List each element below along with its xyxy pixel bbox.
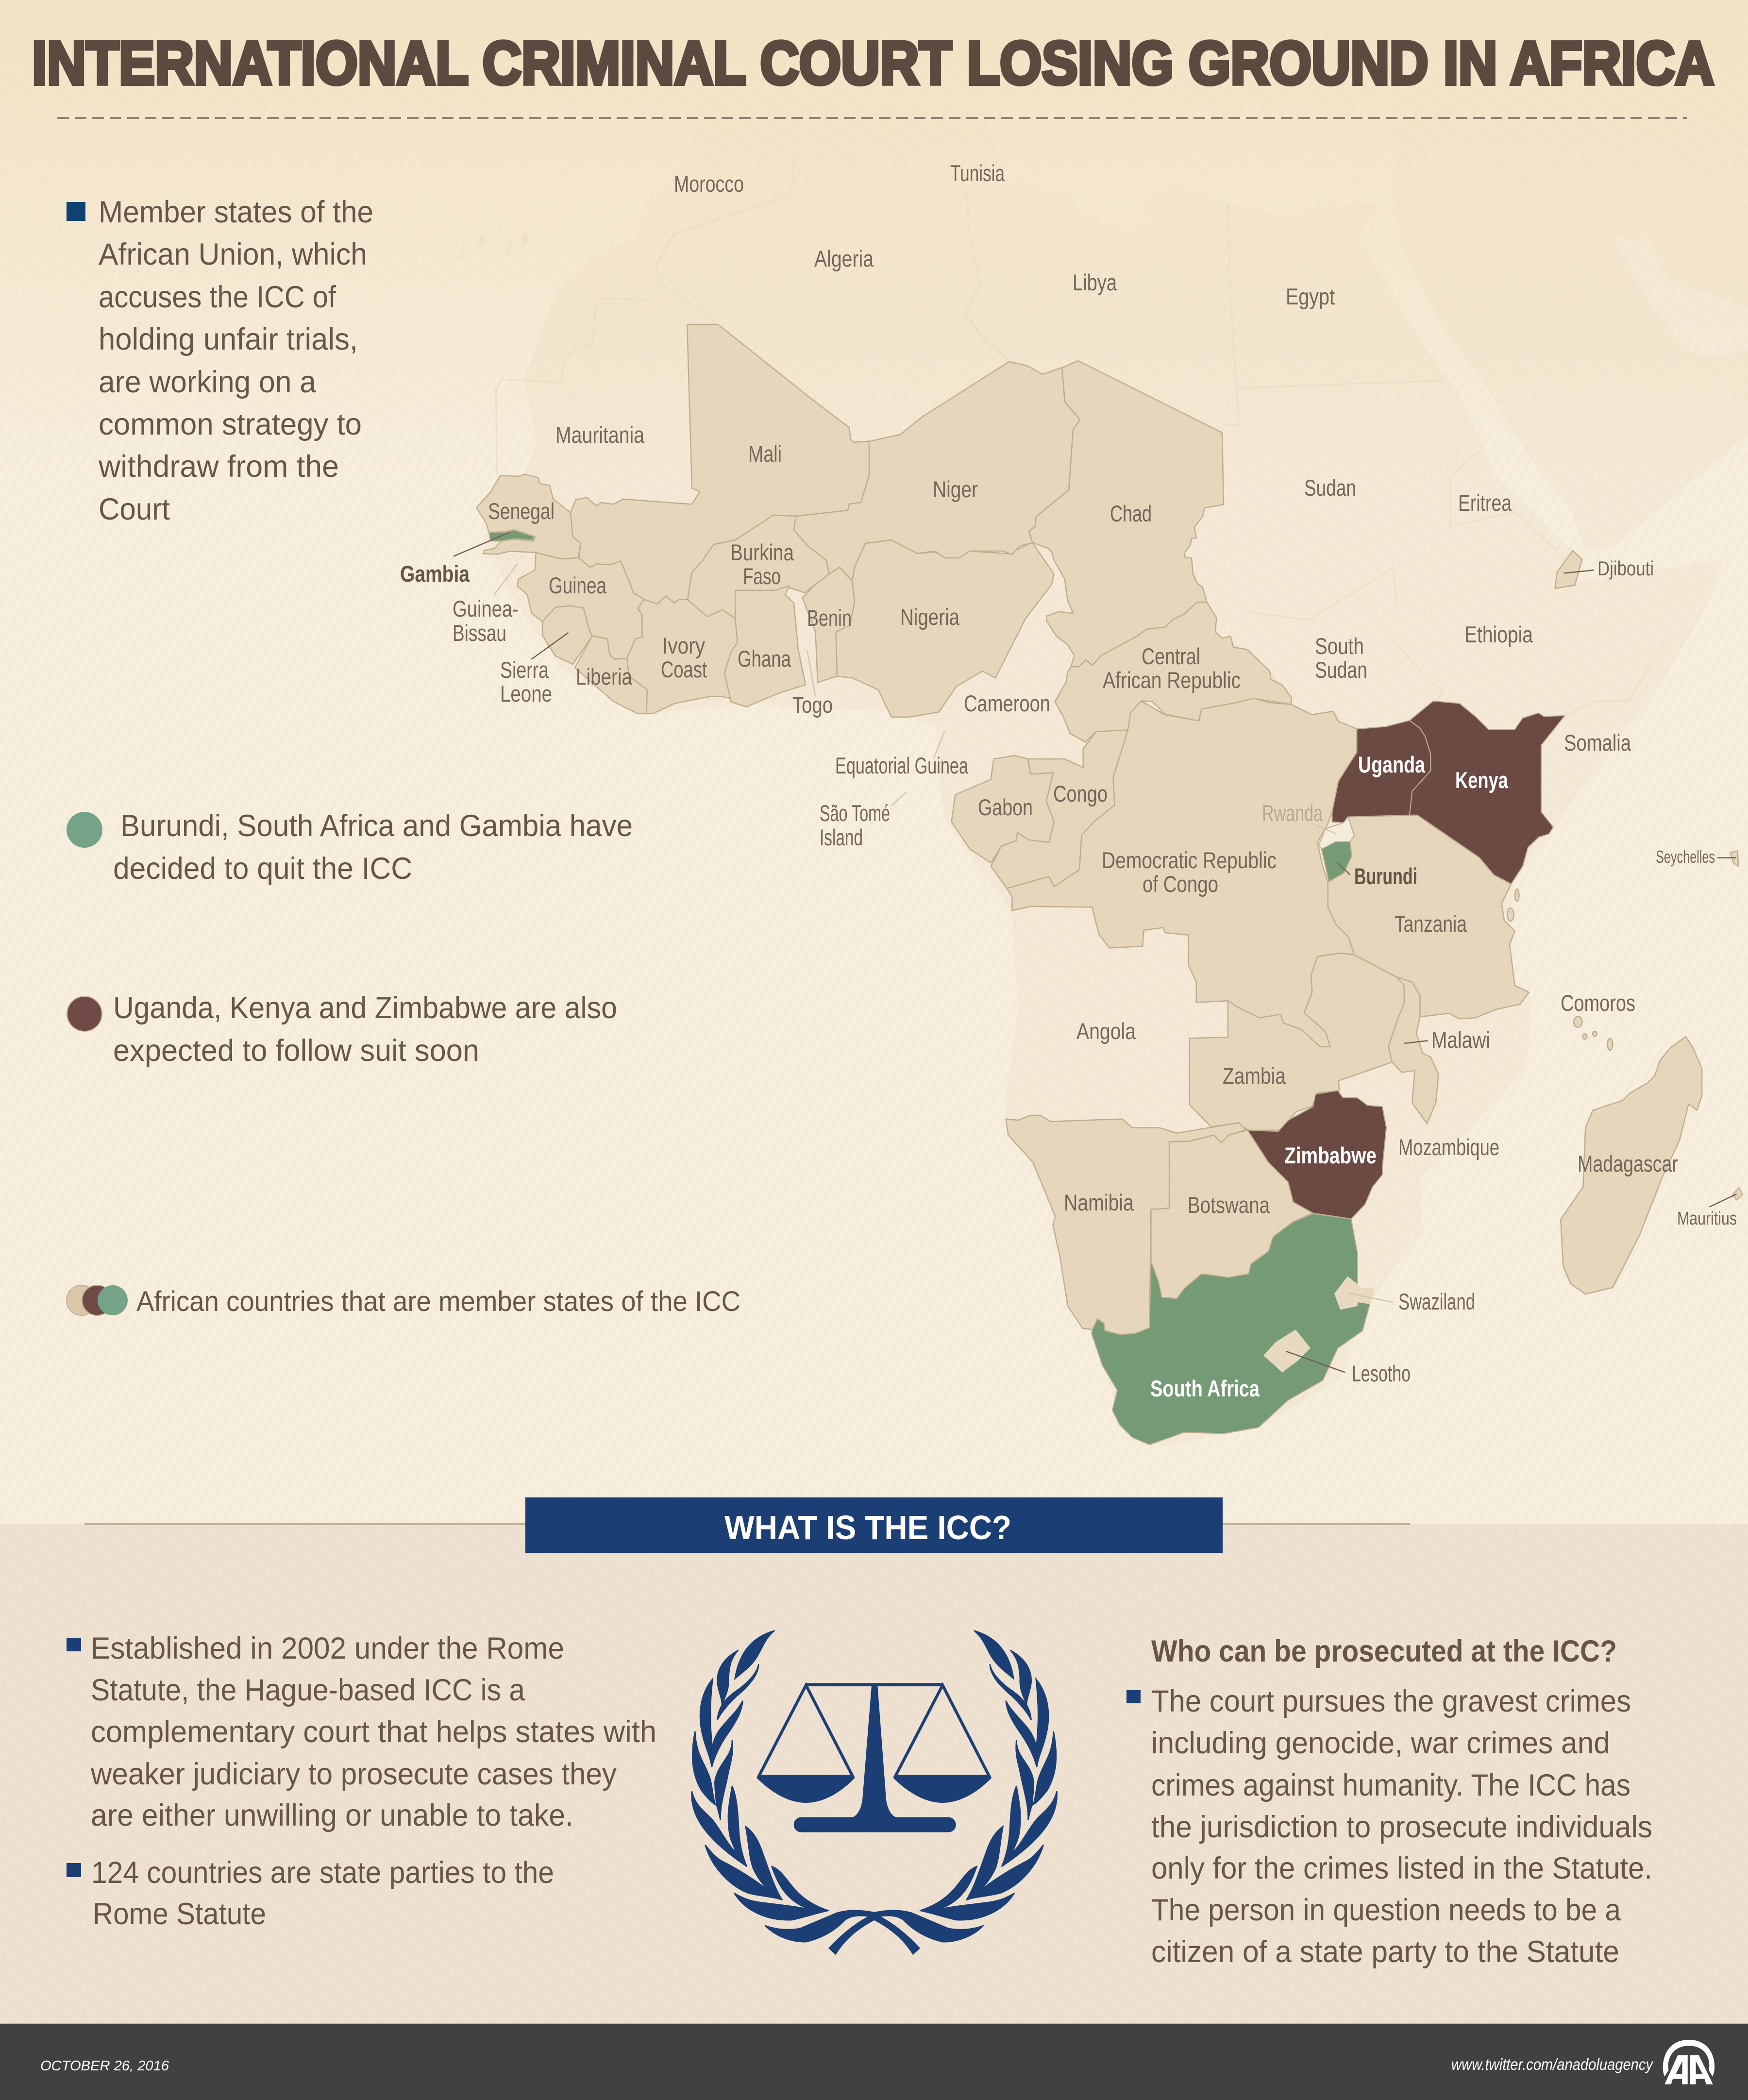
map: country labels: Island xyxy=(820,824,863,850)
island: Seychelles xyxy=(1731,851,1739,866)
map: country labels: Seychelles xyxy=(1656,847,1715,867)
map: country labels: Coast xyxy=(661,656,707,682)
prosecution text: including genocide, war crimes and xyxy=(1151,1726,1610,1760)
map: country labels: Comoros xyxy=(1561,990,1635,1016)
text block: state parties xyxy=(67,1856,554,1931)
establishment text xyxy=(90,1631,656,1832)
legend: member states xyxy=(67,1285,740,1317)
date: OCTOBER 26, 2016 xyxy=(40,2058,169,2074)
map: country labels: South xyxy=(1315,633,1364,659)
map: country labels: Uganda xyxy=(1358,752,1426,777)
icon: Anadolu Agency logo xyxy=(1663,2040,1714,2084)
country: Rwanda xyxy=(1318,817,1354,849)
twitter url: www.twitter.com/anadoluagency xyxy=(1451,2055,1654,2073)
text block: African Union strategy xyxy=(67,195,373,526)
country: Ghana xyxy=(724,586,806,707)
map: country labels: Sierra xyxy=(500,657,549,683)
establishment text: are either unwilling or unable to take. xyxy=(91,1798,573,1832)
map: country labels: Somalia xyxy=(1564,730,1631,756)
map: country labels: São Tomé xyxy=(820,800,890,826)
map: country labels: Guinea xyxy=(549,572,607,598)
wreath right half xyxy=(870,1630,1057,1954)
prosecution text xyxy=(1151,1684,1652,1969)
country: Uganda xyxy=(1332,721,1430,823)
country: Congo xyxy=(991,730,1128,889)
map: country labels: Malawi xyxy=(1431,1027,1490,1053)
map: country labels: Sudan xyxy=(1315,657,1367,683)
country: Burkina Faso xyxy=(688,515,829,618)
prosecution text: citizen of a state party to the Statute xyxy=(1151,1935,1619,1969)
text block: establishment xyxy=(67,1631,656,1832)
map: country labels xyxy=(400,160,1737,1401)
prosecution text: crimes against humanity. The ICC has xyxy=(1151,1768,1630,1802)
country: Malawi xyxy=(1389,977,1439,1124)
strategy text: African Union, which xyxy=(99,237,367,271)
map: country labels: Tanzania xyxy=(1395,911,1467,937)
country: Liberia xyxy=(575,636,647,714)
island: Mauritius xyxy=(1732,1188,1743,1200)
map: country labels: Eritrea xyxy=(1458,490,1512,516)
country: Botswana xyxy=(1151,1130,1313,1298)
islands: Comoros and Zanzibar xyxy=(1508,889,1613,1050)
country: Niger xyxy=(794,362,1080,581)
country: Gabon xyxy=(952,756,1054,863)
map: country labels: Guinea- xyxy=(453,596,519,622)
legend text: quit: decided to quit the ICC xyxy=(113,852,412,886)
country: Swaziland xyxy=(1334,1277,1360,1310)
establishment text: weaker judiciary to prosecute cases they xyxy=(90,1757,617,1791)
map: country labels: Mauritania xyxy=(555,422,645,448)
country: Ivory Coast xyxy=(627,596,738,714)
map: country labels: Morocco xyxy=(674,171,744,197)
map: country labels: Togo xyxy=(792,692,833,718)
state parties text: Rome Statute xyxy=(93,1897,266,1931)
map: faint borders, Mauritania and Western Sahara xyxy=(496,298,1008,475)
strategy text: Member states of the xyxy=(99,195,373,229)
map: country labels: Egypt xyxy=(1286,284,1335,309)
country: Mali xyxy=(571,324,869,604)
country: Nigeria xyxy=(836,540,1054,717)
map: country labels: Equatorial Guinea xyxy=(835,753,969,778)
map: country labels: Democratic Republic xyxy=(1102,847,1277,873)
map: faint borders of non-member countries, north xyxy=(656,156,1557,620)
map: country labels: Mozambique xyxy=(1398,1134,1499,1160)
wreath left half xyxy=(691,1630,878,1954)
country: Djibouti xyxy=(1555,551,1582,588)
prosecution text: the jurisdiction to prosecute individuals xyxy=(1151,1810,1652,1844)
country: Kenya xyxy=(1410,701,1565,884)
map: country labels: Leone xyxy=(500,681,552,706)
map: country labels: Tunisia xyxy=(950,160,1005,186)
map: Chad and Central African Republic xyxy=(1029,361,1291,742)
map: country labels: Zimbabwe xyxy=(1284,1142,1377,1168)
panel: what is the ICC xyxy=(0,1497,1748,2024)
map: faint land masses xyxy=(459,0,1748,1446)
country: Namibia xyxy=(1006,1115,1246,1334)
prosecution text: The court pursues the gravest crimes xyxy=(1151,1684,1631,1718)
map: country labels: African Republic xyxy=(1103,667,1241,693)
map: country labels: Niger xyxy=(933,476,978,502)
text block: who can be prosecuted xyxy=(1126,1634,1652,1969)
map: country labels: Ethiopia xyxy=(1464,622,1533,647)
map: faint borders, South Sudan and Horn of Africa xyxy=(1007,640,1667,1105)
map: leader lines xyxy=(454,532,1737,1373)
subheading: Who can be prosecuted at the ICC? xyxy=(1151,1634,1617,1668)
icon: bullet xyxy=(1126,1690,1141,1703)
strategy text: are working on a xyxy=(99,365,317,399)
establishment text: Established in 2002 under the Rome xyxy=(91,1631,564,1665)
map: country labels: Kenya xyxy=(1455,767,1509,793)
icon: blue bullet xyxy=(67,202,85,221)
map: country labels: Swaziland xyxy=(1398,1289,1475,1314)
map: Central and East Africa xyxy=(952,698,1739,1130)
map: country labels: Burkina xyxy=(730,539,794,565)
country: South Africa xyxy=(1092,1213,1370,1445)
map: country labels: Namibia xyxy=(1064,1190,1134,1215)
country: Chad xyxy=(1029,361,1224,667)
country: Guinea xyxy=(517,553,644,659)
strategy text: withdraw from the xyxy=(98,450,339,484)
legend text: quit xyxy=(113,809,633,886)
map: country labels: Ivory xyxy=(662,633,705,658)
map: country labels: Liberia xyxy=(576,664,633,689)
map: country labels: Burundi xyxy=(1354,863,1417,889)
map: Southern Africa xyxy=(1006,1037,1743,1445)
country: Lesotho xyxy=(1263,1329,1311,1373)
map: country labels: Congo xyxy=(1053,781,1108,806)
icon: bullet xyxy=(67,1638,81,1651)
map: country labels: Central xyxy=(1142,643,1200,669)
prosecution text: The person in question needs to be a xyxy=(1151,1893,1621,1927)
heading banner xyxy=(525,1497,1223,1553)
strategy text: common strategy to xyxy=(99,407,362,441)
map: country labels: Algeria xyxy=(814,246,874,271)
map: country labels: Cameroon xyxy=(964,690,1050,716)
map: country labels: Djibouti xyxy=(1597,557,1654,580)
map: country labels: Nigeria xyxy=(900,604,960,630)
map: country labels: Rwanda xyxy=(1262,800,1323,826)
footer xyxy=(0,2023,1748,2100)
icon: three overlapping dots xyxy=(67,1285,128,1315)
map: country labels: Chad xyxy=(1110,501,1152,526)
country: Central African Republic xyxy=(1055,602,1291,742)
country: Benin xyxy=(803,567,855,682)
map: country labels: Benin xyxy=(807,605,852,631)
country: Madagascar xyxy=(1561,1037,1702,1294)
map: country labels: Faso xyxy=(743,563,781,589)
map: country labels: Gabon xyxy=(978,794,1033,820)
country: Zambia xyxy=(1190,953,1404,1130)
heading banner: WHAT IS THE ICC? xyxy=(724,1509,1011,1546)
map: country labels: Botswana xyxy=(1188,1192,1270,1218)
strategy text: accuses the ICC of xyxy=(99,280,336,314)
map: country labels: Senegal xyxy=(488,498,555,524)
establishment text: Statute, the Hague-based ICC is a xyxy=(91,1673,525,1707)
map: country labels: of Congo xyxy=(1143,871,1218,897)
strategy text: Court xyxy=(99,492,170,526)
legend text: members: African countries that are member states of the ICC xyxy=(136,1286,740,1317)
legend: expected to follow xyxy=(67,991,617,1068)
map: country labels: Libya xyxy=(1073,269,1117,295)
legend text: follow: Uganda, Kenya and Zimbabwe are also xyxy=(113,991,617,1025)
southern Mozambique strip xyxy=(1358,1288,1375,1304)
map: country labels: Angola xyxy=(1076,1018,1136,1044)
map: country labels: Madagascar xyxy=(1578,1151,1678,1176)
legend: decided to quit xyxy=(67,809,633,886)
country: Zimbabwe xyxy=(1247,1091,1386,1219)
establishment text: complementary court that helps states with xyxy=(91,1715,656,1749)
map: country labels: Zambia xyxy=(1223,1063,1286,1089)
scales of justice xyxy=(756,1683,992,1832)
map: country labels: Sudan xyxy=(1304,475,1356,501)
map: country labels: Lesotho xyxy=(1352,1361,1411,1386)
icon: brown dot xyxy=(67,996,102,1031)
icon: bullet xyxy=(67,1863,81,1877)
legend text: quit: Burundi, South Africa and Gambia have xyxy=(120,809,633,843)
country: Tanzania xyxy=(1328,815,1529,1019)
legend text: follow: expected to follow suit soon xyxy=(113,1034,479,1068)
strategy text: holding unfair trials, xyxy=(99,322,358,356)
country: Gambia xyxy=(489,530,534,541)
map: country labels: Mali xyxy=(748,441,782,467)
strategy text xyxy=(98,195,373,526)
country: Burundi xyxy=(1322,842,1352,882)
country: Senegal xyxy=(476,474,581,559)
legend text: follow xyxy=(113,991,617,1068)
map: country labels: South Africa xyxy=(1150,1376,1260,1401)
map: country labels: Bissau xyxy=(453,620,506,646)
icon: green dot xyxy=(67,812,102,848)
map: country labels: Gambia xyxy=(400,561,470,587)
icon: ICC scales and laurel wreath xyxy=(691,1630,1057,1954)
map: West Africa member states xyxy=(476,324,1054,717)
country: Democratic Republic of Congo xyxy=(1007,698,1357,1047)
state parties text: 124 countries are state parties to the xyxy=(91,1856,554,1890)
country: Sierra Leone xyxy=(542,605,592,664)
map: country labels: Ghana xyxy=(738,646,791,672)
state parties text xyxy=(91,1856,554,1931)
prosecution text: only for the crimes listed in the Statute. xyxy=(1151,1851,1652,1885)
